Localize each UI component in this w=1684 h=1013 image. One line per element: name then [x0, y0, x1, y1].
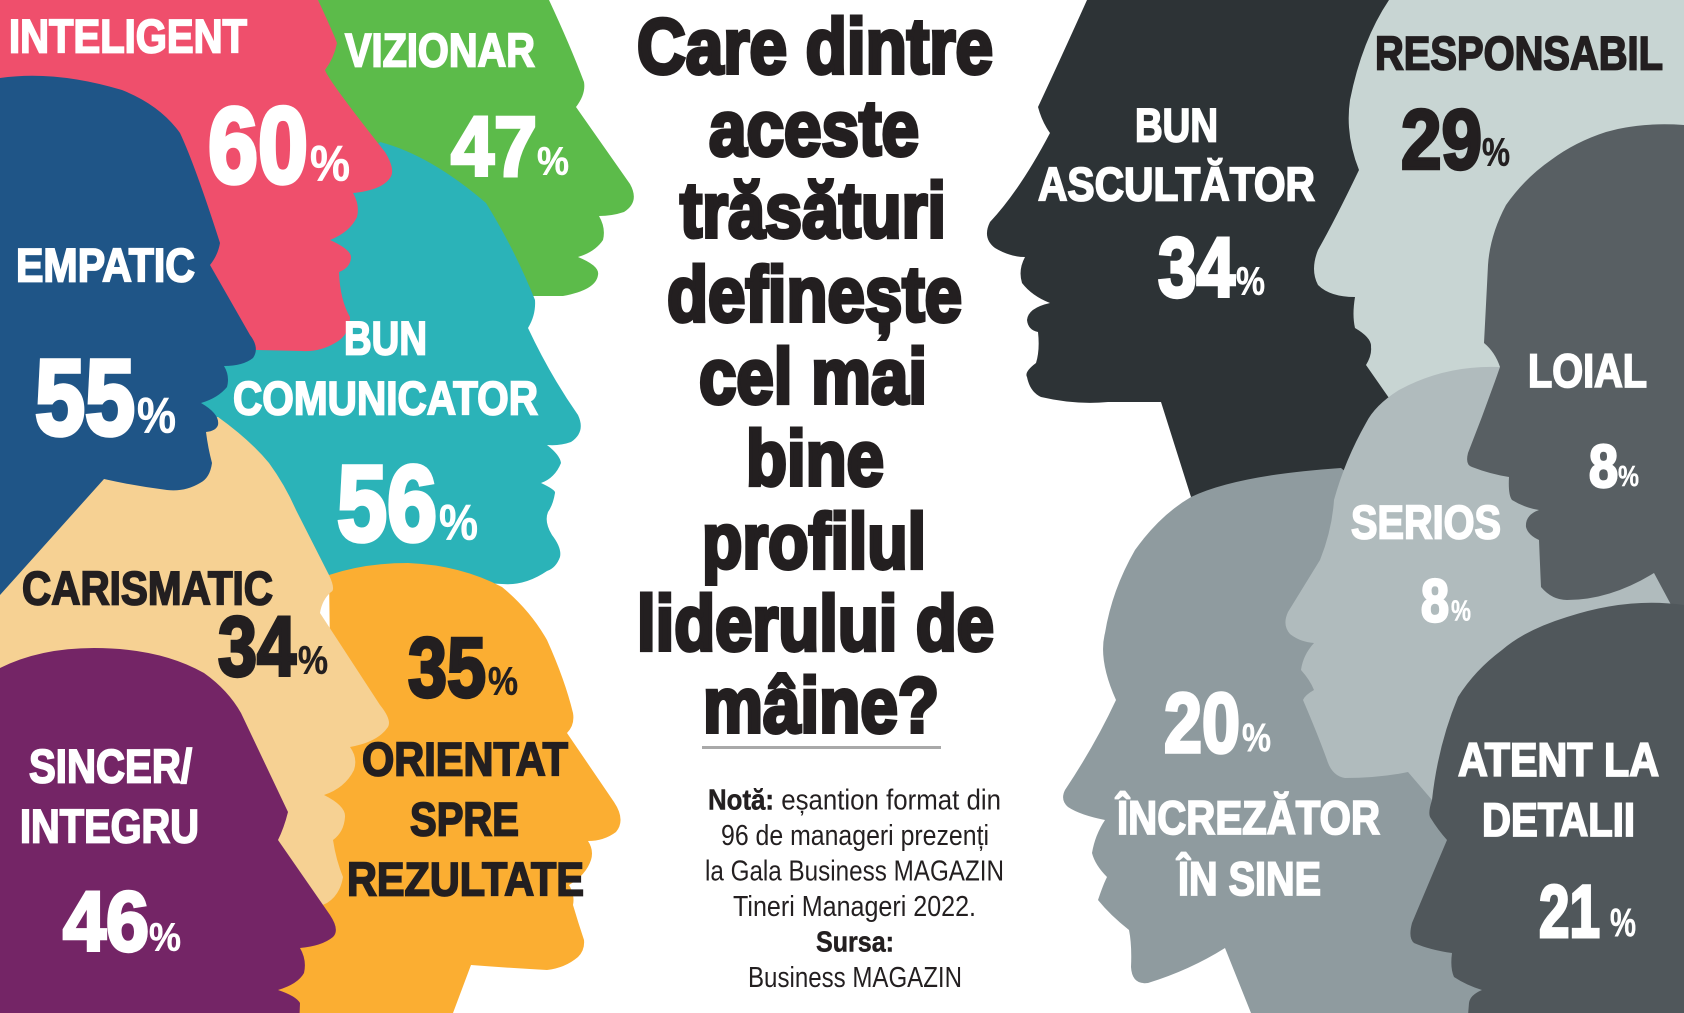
label: orientat spre rezultate 35%	[347, 620, 584, 906]
label: orientat spre rezultate 35%: %	[488, 660, 518, 704]
label: responsabil 29%: %	[1482, 130, 1510, 174]
title: cel mai	[699, 332, 927, 420]
label: bun comunicator 56%: COMUNICATOR	[233, 372, 538, 424]
label: atent la detalii 21%: DETALII	[1482, 793, 1635, 846]
head silhouette: pink	[0, 0, 392, 351]
title: Care dintre	[637, 2, 993, 90]
label: loial 8%: LOIAL	[1528, 344, 1647, 397]
label: carismatic 34%: %	[298, 638, 328, 682]
head silhouette: pale grey	[1314, 0, 1684, 500]
label: inteligent 60%: 60	[208, 84, 308, 206]
head silhouette: tan	[0, 417, 389, 915]
note and source: Business MAGAZIN	[748, 962, 962, 994]
note and source: 96 de manageri prezenți	[721, 820, 989, 852]
label: vizionar 47%: VIZIONAR	[345, 24, 535, 76]
label: sincer integru 46%	[20, 740, 199, 968]
head silhouette: teal	[180, 142, 581, 584]
head silhouette: navy	[0, 76, 256, 640]
label: atent la detalii 21%	[1458, 733, 1659, 953]
head silhouette: slate	[1467, 124, 1684, 640]
label: inteligent 60%: INTELIGENT	[9, 10, 247, 62]
label: responsabil 29%: 29	[1401, 92, 1482, 186]
label: sincer integru 46%: 46	[63, 874, 149, 968]
label: vizionar 47%: %	[537, 140, 569, 184]
note and source	[705, 784, 1004, 994]
label: orientat spre rezultate 35%: SPRE	[410, 792, 519, 846]
label: orientat spre rezultate 35%: REZULTATE	[347, 852, 584, 906]
label: inteligent 60%: %	[310, 136, 350, 192]
label: loial 8%	[1528, 344, 1647, 500]
title: definește	[667, 250, 962, 340]
label: increzator in sine 20%: %	[1242, 716, 1271, 760]
label: serios 8%	[1351, 496, 1501, 634]
label: vizionar 47%	[345, 24, 569, 194]
label: atent la detalii 21%: 21	[1539, 870, 1600, 953]
label: carismatic 34%	[22, 562, 328, 694]
label: bun ascultator 34%: BUN	[1135, 98, 1218, 152]
label: orientat spre rezultate 35%: ORIENTAT	[362, 732, 568, 786]
head silhouette: green	[300, 0, 634, 296]
label: carismatic 34%: 34	[218, 600, 296, 694]
label: empatic 55%: 55	[35, 336, 135, 458]
label: empatic 55%: EMPATIC	[16, 238, 195, 292]
label: bun comunicator 56%: %	[439, 494, 478, 550]
label: inteligent 60%	[9, 10, 350, 206]
label: increzator in sine 20%	[1115, 676, 1380, 905]
label: serios 8%: SERIOS	[1351, 496, 1501, 548]
head silhouette: orange	[250, 563, 621, 1013]
label: sincer integru 46%: INTEGRU	[20, 800, 199, 852]
title: bine	[746, 414, 884, 502]
label: increzator in sine 20%: ÎNCREZĂTOR	[1115, 791, 1380, 844]
label: serios 8%: 8	[1421, 568, 1449, 634]
label: bun ascultator 34%: ASCULTĂTOR	[1038, 158, 1315, 210]
label: carismatic 34%: CARISMATIC	[22, 562, 273, 614]
label: orientat spre rezultate 35%: 35	[408, 620, 486, 714]
label: bun ascultator 34%: 34	[1158, 220, 1235, 314]
head silhouette: purple	[0, 648, 336, 1013]
label: sincer integru 46%: SINCER/	[29, 740, 192, 792]
label: atent la detalii 21%: ATENT LA	[1458, 733, 1659, 786]
head silhouette: charcoal	[987, 0, 1400, 500]
label: empatic 55%	[16, 238, 195, 458]
title: trăsături	[680, 166, 946, 254]
title: aceste	[709, 84, 919, 172]
label: empatic 55%: %	[137, 388, 176, 444]
head silhouette: light grey	[1285, 367, 1684, 800]
label: bun ascultator 34%: %	[1236, 260, 1265, 304]
label: increzator in sine 20%: 20	[1164, 676, 1240, 770]
label: loial 8%: 8	[1589, 433, 1618, 500]
label: atent la detalii 21%: %	[1610, 901, 1636, 945]
title: profilul	[702, 497, 926, 585]
title	[637, 2, 994, 749]
title underline	[702, 746, 941, 749]
note and source: Tineri Manageri 2022.	[733, 891, 976, 923]
label: bun comunicator 56%: 56	[337, 442, 437, 564]
label: increzator in sine 20%: ÎN SINE	[1176, 852, 1321, 905]
title: liderului de	[637, 579, 994, 667]
label: bun comunicator 56%: BUN	[344, 312, 427, 364]
note and source: la Gala Business MAGAZIN	[705, 856, 1004, 888]
label: vizionar 47%: 47	[451, 100, 537, 194]
label: bun comunicator 56%	[233, 312, 538, 564]
title: mâine?	[703, 661, 939, 749]
label: sincer integru 46%: %	[149, 916, 181, 960]
label: serios 8%: %	[1451, 596, 1471, 628]
label: bun ascultator 34%	[1038, 98, 1315, 314]
note and source: Sursa:	[816, 926, 894, 958]
label: loial 8%: %	[1618, 461, 1639, 493]
head silhouette: dark slate	[1410, 603, 1684, 1013]
note and source: Notă: eșantion format din	[708, 784, 1001, 816]
head silhouette: medium grey	[1063, 468, 1500, 1013]
label: responsabil 29%	[1375, 26, 1663, 186]
